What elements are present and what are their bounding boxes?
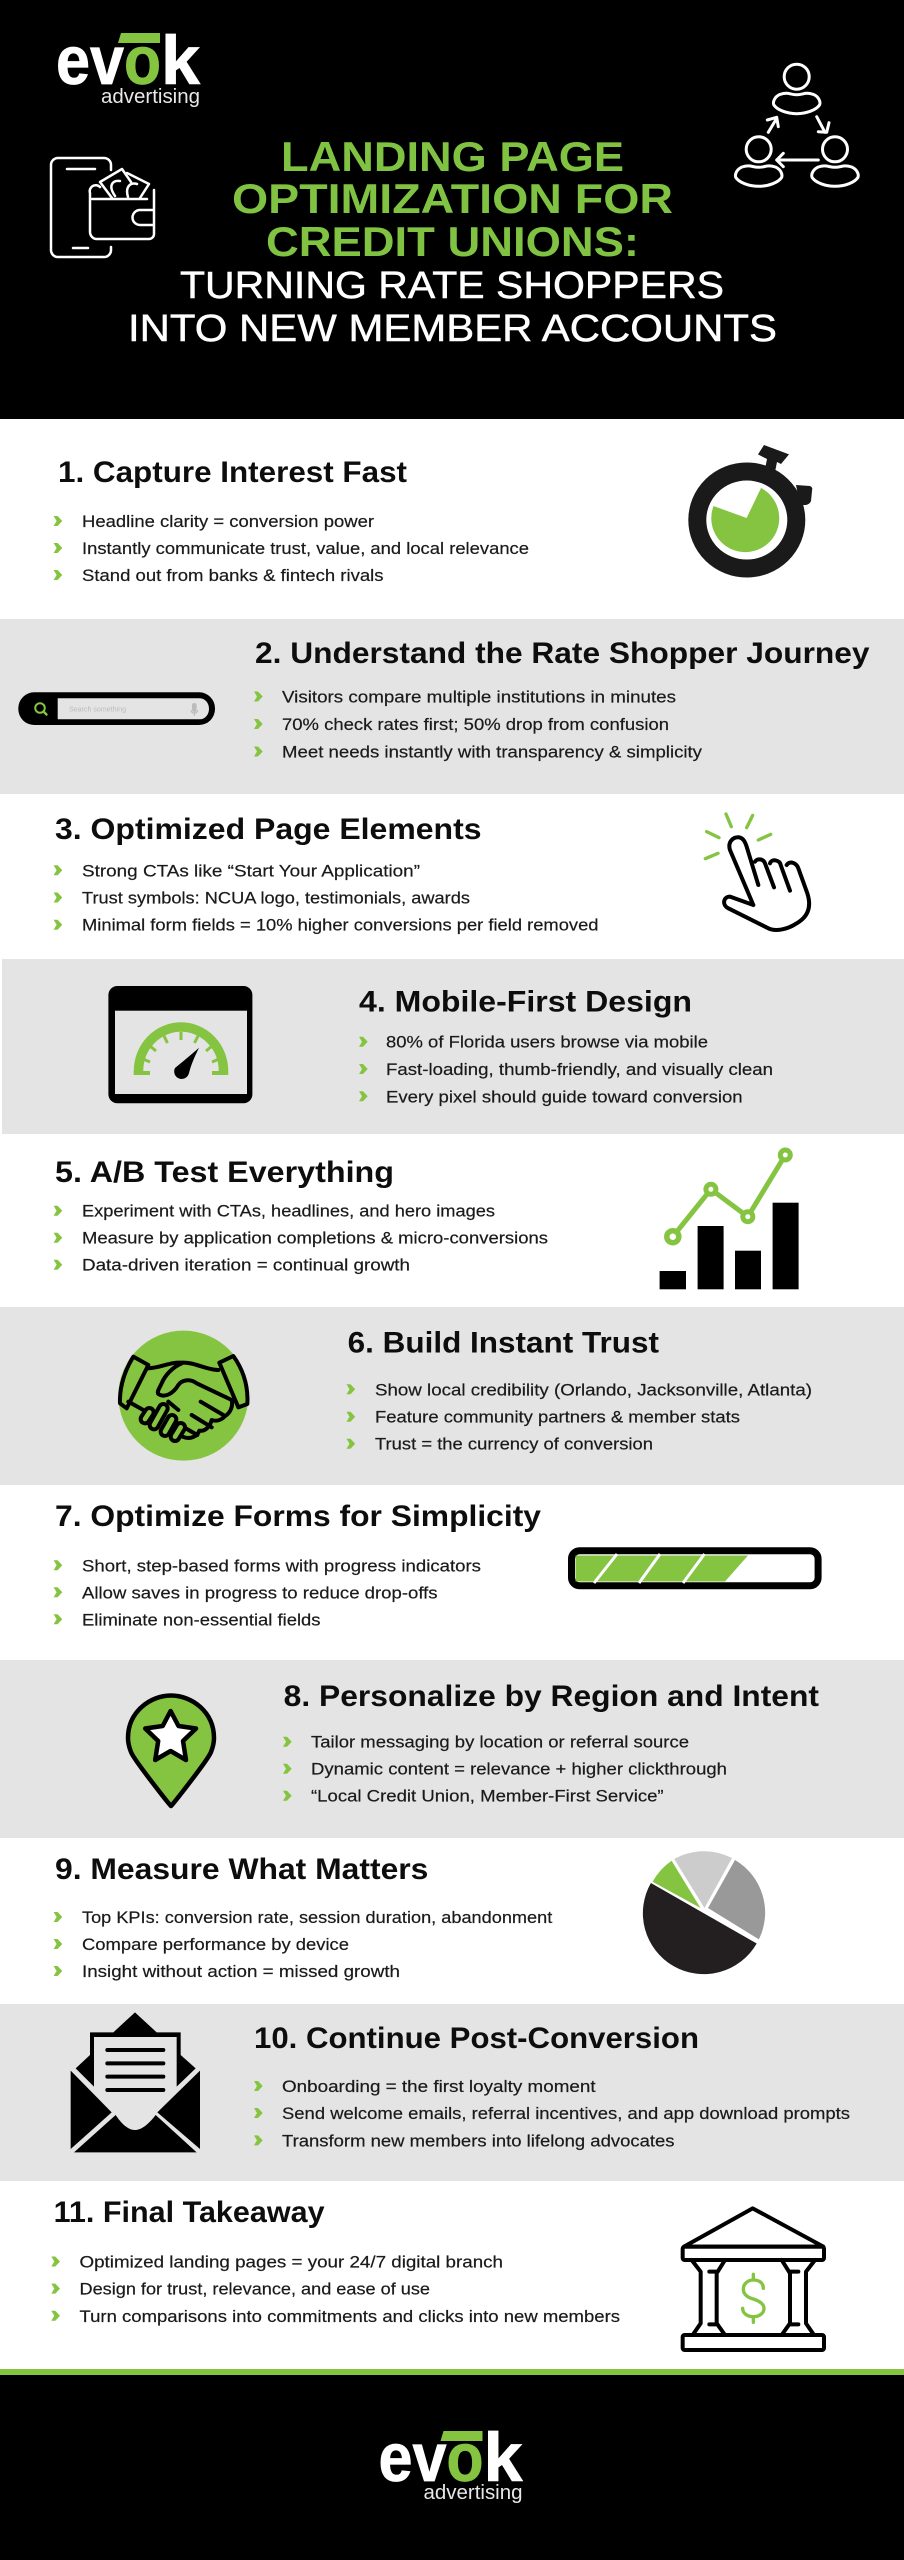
panel: 1. Capture Interest Fast (0, 419, 904, 619)
logo: evok advertising footer: k (484, 2419, 523, 2496)
panel: 2. Understand the Rate Shopper Journey (0, 619, 904, 794)
heading: section 4: 4. Mobile-First Design (359, 986, 692, 1019)
title: LANDING PAGE (281, 133, 624, 180)
icon: handshake in green circle (118, 1331, 248, 1461)
title: CREDIT UNIONS: (266, 218, 639, 265)
bullet list: section 8: Tailor messaging by location or referral source (311, 1734, 689, 1752)
logo: evok advertising: ev (56, 22, 125, 99)
bullet list: section 3 (54, 862, 599, 935)
panel: 3. Optimized Page Elements (0, 794, 904, 959)
bullet list: section 8: Dynamic content = relevance + higher clickthrough (311, 1761, 727, 1779)
logo: evok advertising footer (378, 2419, 523, 2504)
bullet list: section 8 (283, 1734, 727, 1806)
bullet list: section 2: 70% check rates first; 50% drop from confusion (282, 716, 669, 734)
bullet list: section 10 (254, 2078, 850, 2150)
icon: map pin with star (128, 1696, 214, 1806)
title: TURNING RATE SHOPPERS (180, 265, 724, 307)
bullet list: section 9: Compare performance by device (82, 1936, 349, 1954)
logo: evok advertising footer: o (446, 2419, 484, 2496)
logo: evok advertising footer: ev (378, 2419, 447, 2496)
heading: section 1: 1. Capture Interest Fast (58, 456, 407, 489)
bullet list: section 6 (346, 1381, 812, 1454)
panel: 5. A/B Test Everything (0, 1134, 904, 1307)
logo: evok advertising: k (161, 22, 201, 99)
bullet list: section 4 (359, 1034, 773, 1106)
bullet list: section 11: Design for trust, relevance, and ease of use (80, 2281, 430, 2299)
logo: evok advertising: advertising (101, 86, 200, 108)
panel: header (0, 0, 904, 419)
title: OPTIMIZATION FOR (232, 175, 673, 222)
heading: section 5: 5. A/B Test Everything (55, 1156, 394, 1189)
bullet list: section 1: Instantly communicate trust, value, and local relevance (82, 540, 529, 558)
bullet list: section 5: Data-driven iteration = continual growth (82, 1257, 410, 1275)
panel: 6. Build Instant Trust (0, 1307, 904, 1485)
bullet list: section 7: Allow saves in progress to reduce drop-offs (82, 1584, 438, 1602)
bullet list: section 11: Optimized landing pages = your 24/7 digital branch (80, 2254, 503, 2272)
logo: evok advertising: o (124, 22, 161, 99)
bullet list: section 7 (54, 1557, 481, 1629)
icon: open envelope with letter (71, 2012, 200, 2152)
panel: 8. Personalize by Region and Intent (0, 1660, 904, 1838)
bullet list: section 6: Feature community partners & member stats (375, 1409, 740, 1427)
heading: section 2: 2. Understand the Rate Shopper Journey (255, 637, 870, 670)
bullet list: section 2: Visitors compare multiple institutions in minutes (282, 688, 676, 706)
bullet list: section 10: Onboarding = the first loyalty moment (282, 2078, 596, 2096)
bullet list: section 11: Turn comparisons into commitments and clicks into new members (80, 2308, 620, 2326)
panel: 7. Optimize Forms for Simplicity (0, 1485, 904, 1660)
bullet list: section 5 (54, 1203, 548, 1275)
chart icon: growth bars and trend line (660, 1150, 799, 1289)
bullet list: section 2: Meet needs instantly with transparency & simplicity (282, 744, 703, 762)
icon: bank building with dollar sign (683, 2208, 824, 2350)
logo: evok advertising footer: advertising (424, 2482, 522, 2504)
icon: three people in a referral cycle (735, 64, 858, 186)
bullet list: section 6: Trust = the currency of conversion (375, 1436, 653, 1454)
bullet list: section 4: Every pixel should guide toward conversion (386, 1088, 743, 1106)
bullet list: section 1 (54, 513, 529, 585)
title (128, 133, 777, 350)
heading: section 7: 7. Optimize Forms for Simplicity (55, 1500, 541, 1533)
bullet list: section 3: Strong CTAs like “Start Your Application” (82, 862, 420, 880)
bullet list: section 10: Transform new members into lifelong advocates (282, 2132, 674, 2150)
bullet list: section 4: Fast-loading, thumb-friendly, and visually clean (386, 1061, 773, 1079)
panel: 11. Final Takeaway (0, 2181, 904, 2369)
heading: section 8: 8. Personalize by Region and Intent (284, 1680, 819, 1713)
heading: section 10: 10. Continue Post-Conversion (254, 2022, 699, 2055)
icon: browser window with speed gauge (108, 986, 252, 1103)
logo: evok advertising (56, 22, 201, 108)
panel: 4. Mobile-First Design (2, 959, 904, 1134)
panel: 9. Measure What Matters (0, 1838, 904, 2004)
heading: section 6: 6. Build Instant Trust (348, 1327, 659, 1360)
heading: section 11: 11. Final Takeaway (54, 2196, 325, 2229)
bullet list: section 9 (54, 1909, 553, 1981)
icon: progress bar (572, 1551, 818, 1586)
heading: section 3: 3. Optimized Page Elements (55, 813, 482, 846)
bullet list: section 1: Stand out from banks & fintech rivals (82, 567, 384, 585)
bullet list: section 3: Minimal form fields = 10% higher conversions per field removed (82, 917, 598, 935)
chart icon: pie chart (643, 1851, 765, 1974)
icon: search bar (18, 692, 215, 725)
bullet list: section 5: Measure by application completions & micro-conversions (82, 1230, 548, 1248)
bullet list: section 10: Send welcome emails, referral incentives, and app download prompts (282, 2105, 850, 2123)
bullet list: section 5: Experiment with CTAs, headlines, and hero images (82, 1203, 495, 1221)
panel: footer (0, 2369, 904, 2560)
bullet list: section 9: Insight without action = missed growth (82, 1963, 400, 1981)
icon: phone and wallet (51, 158, 154, 257)
bullet list: section 7: Eliminate non-essential fields (82, 1611, 320, 1629)
bullet list: section 6: Show local credibility (Orlando, Jacksonville, Atlanta) (375, 1381, 812, 1399)
icon: pointing hand clicking (705, 814, 809, 930)
panel: 10. Continue Post-Conversion (0, 2004, 904, 2181)
bullet list: section 4: 80% of Florida users browse via mobile (386, 1034, 708, 1052)
heading: section 9: 9. Measure What Matters (55, 1853, 428, 1886)
bullet list: section 1: Headline clarity = conversion power (82, 513, 375, 531)
bullet list: section 2 (254, 688, 703, 762)
bullet list: section 7: Short, step-based forms with progress indicators (82, 1557, 481, 1575)
icon: stopwatch (697, 445, 812, 568)
title: INTO NEW MEMBER ACCOUNTS (128, 308, 777, 350)
bullet list: section 3: Trust symbols: NCUA logo, testimonials, awards (82, 890, 470, 908)
icon: search bar: Search something (69, 704, 126, 714)
bullet list: section 9: Top KPIs: conversion rate, session duration, abandonment (82, 1909, 553, 1927)
bullet list: section 8: “Local Credit Union, Member-First Service” (311, 1788, 664, 1806)
bullet list: section 11 (51, 2254, 620, 2326)
